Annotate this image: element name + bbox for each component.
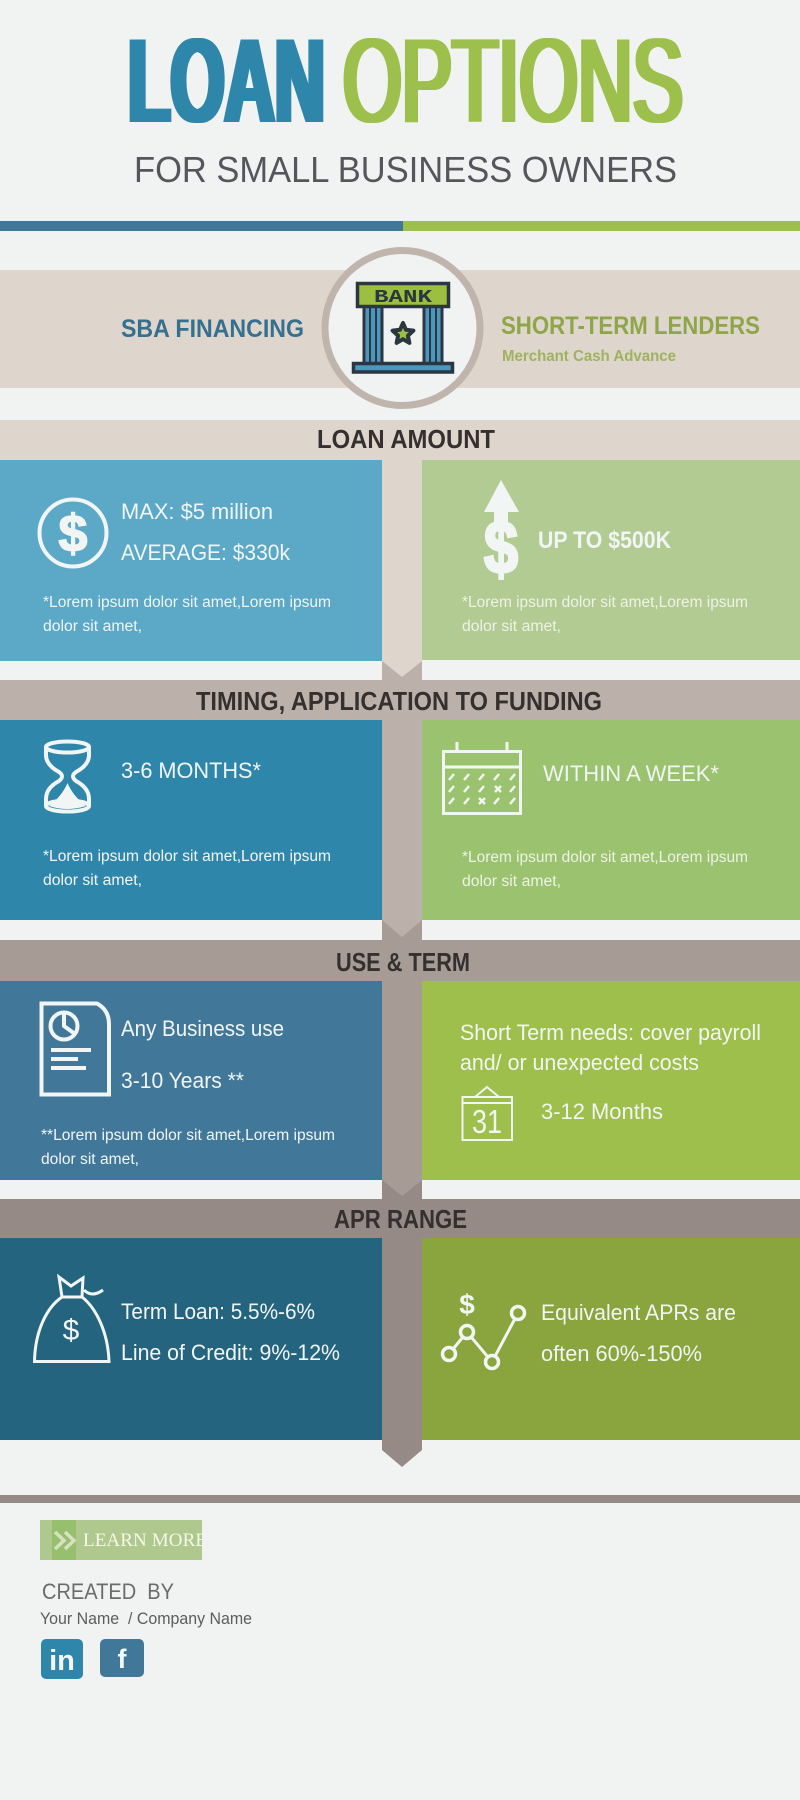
use: and/ or unexpected costs — [460, 1050, 699, 1075]
icon: facebook: f — [118, 1644, 128, 1674]
panel: use and term — [0, 940, 800, 1180]
APR text: Equivalent APRs are — [541, 1300, 736, 1325]
button: learn more: LEARN MORE — [83, 1530, 207, 1551]
footnote: *Lorem ipsum dolor sit amet,Lorem ipsum — [462, 594, 748, 611]
SBA financing label: SBA FINANCING — [121, 315, 304, 343]
icon: line graph with dollar: $ — [459, 1289, 475, 1320]
icon: linkedin — [41, 1639, 83, 1679]
icon: money bag: $ — [63, 1314, 80, 1347]
card: short-term loan amount — [422, 460, 800, 660]
average amount: AVERAGE: $330k — [121, 540, 291, 565]
icon: dollar with up arrow: $ — [484, 506, 518, 589]
arrow: center spine — [382, 460, 422, 1467]
panel: lender types — [0, 250, 800, 406]
icon: bank — [325, 250, 480, 406]
duration: 3-6 MONTHS* — [121, 758, 261, 783]
card: SBA timing — [0, 720, 382, 920]
footnote — [43, 594, 331, 635]
icon: calendar page: 31 — [472, 1103, 502, 1140]
panel: loan amount — [0, 420, 800, 661]
section band: APR range — [0, 1199, 800, 1238]
card: short-term APR — [422, 1238, 800, 1440]
footer divider — [0, 1495, 800, 1503]
line of credit APR: Line of Credit: 9%-12% — [121, 1340, 340, 1365]
created by heading: CREATED BY — [42, 1579, 174, 1604]
title: LOAN — [128, 14, 325, 148]
duration: WITHIN A WEEK* — [543, 761, 719, 786]
use: Short Term needs: cover payroll — [460, 1020, 761, 1045]
icon: hourglass — [46, 742, 89, 812]
footnote: *Lorem ipsum dolor sit amet,Lorem ipsum — [43, 848, 331, 865]
footnote: **Lorem ipsum dolor sit amet,Lorem ipsum — [41, 1127, 335, 1144]
use — [460, 1020, 761, 1075]
card: short-term use and term — [422, 981, 800, 1180]
term: 3-12 Months — [541, 1099, 663, 1124]
icon: money bag — [34, 1277, 109, 1362]
subtitle: FOR SMALL BUSINESS OWNERS — [134, 149, 677, 190]
icon: document with pie chart — [42, 1004, 109, 1094]
heading: loan amount: LOAN AMOUNT — [317, 424, 495, 454]
card: SBA use and term — [0, 981, 382, 1180]
use: Any Business use — [121, 1016, 284, 1041]
icon: dollar coin: $ — [59, 505, 88, 563]
footnote: dolor sit amet, — [462, 618, 561, 635]
footnote: *Lorem ipsum dolor sit amet,Lorem ipsum — [43, 594, 331, 611]
header divider — [0, 221, 800, 231]
icon: bank: BANK — [374, 288, 432, 308]
icon: calendar — [443, 742, 521, 814]
short-term lenders label: SHORT-TERM LENDERS — [501, 312, 760, 340]
section band: loan amount — [0, 420, 800, 460]
card: SBA APR — [0, 1238, 382, 1440]
up to amount: UP TO $500K — [538, 527, 672, 554]
icon: calendar page — [462, 1087, 512, 1140]
heading: timing: TIMING, APPLICATION TO FUNDING — [196, 686, 602, 716]
footnote: dolor sit amet, — [462, 873, 561, 890]
max amount: MAX: $5 million — [121, 499, 273, 524]
footnote — [41, 1127, 335, 1168]
footnote — [462, 594, 748, 635]
APR text — [541, 1300, 736, 1366]
icon: line graph with dollar — [442, 1289, 524, 1368]
title — [128, 14, 683, 148]
section band: use and term — [0, 940, 800, 981]
button: learn more — [40, 1520, 207, 1560]
section band: timing — [0, 680, 800, 720]
icon: facebook — [100, 1639, 144, 1677]
footnote — [43, 848, 331, 889]
footnote — [462, 849, 748, 890]
APR text: often 60%-150% — [541, 1341, 702, 1366]
term loan APR: Term Loan: 5.5%-6% — [121, 1299, 315, 1324]
panel: APR range — [0, 1199, 800, 1440]
footnote: dolor sit amet, — [43, 618, 142, 635]
author name: Your Name / Company Name — [40, 1610, 252, 1628]
icon: dollar coin — [40, 500, 106, 566]
icon: dollar with up arrow — [484, 480, 519, 589]
footnote: *Lorem ipsum dolor sit amet,Lorem ipsum — [462, 849, 748, 866]
heading: use and term: USE & TERM — [336, 947, 470, 977]
term: 3-10 Years ** — [121, 1068, 244, 1093]
merchant cash advance label: Merchant Cash Advance — [502, 348, 676, 365]
heading: APR range: APR RANGE — [334, 1204, 467, 1234]
footnote: dolor sit amet, — [43, 872, 142, 889]
icon: linkedin: in — [49, 1645, 75, 1677]
card: short-term timing — [422, 720, 800, 920]
card: SBA loan amount — [0, 460, 382, 661]
footnote: dolor sit amet, — [41, 1151, 139, 1168]
panel: timing — [0, 680, 800, 920]
